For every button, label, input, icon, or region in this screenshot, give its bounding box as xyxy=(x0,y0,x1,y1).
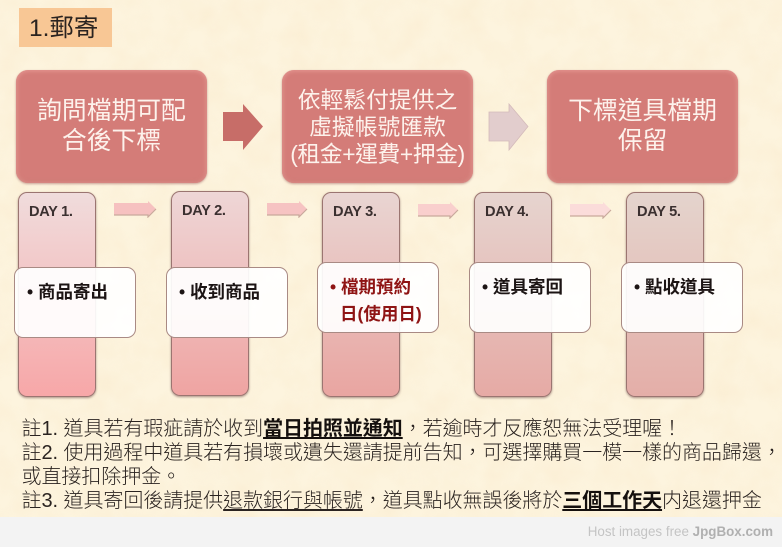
card: 收到商品 xyxy=(166,267,288,338)
day column 2: DAY 2. xyxy=(182,203,226,219)
card: 商品寄出 xyxy=(14,267,136,338)
day column 3: DAY 3. xyxy=(333,204,377,220)
card: 商品寄出: • 商品寄出 xyxy=(27,282,108,302)
day column 1 xyxy=(18,192,96,397)
title: 1.郵寄: 1.郵寄 xyxy=(29,15,98,42)
arrow: step 2 to step 3 xyxy=(488,103,528,151)
title: 1.郵寄 xyxy=(19,8,112,47)
day column 5: DAY 5. xyxy=(637,204,681,220)
card: 點收道具: • 點收道具 xyxy=(634,277,715,297)
day column 4: DAY 4. xyxy=(485,204,529,220)
arrow: step 1 to step 2 xyxy=(223,104,263,150)
card: 道具寄回: • 道具寄回 xyxy=(482,277,563,297)
step box: 下標道具檔期保留: 保留 xyxy=(618,128,667,155)
small arrow: day 4 to day 5 xyxy=(570,202,612,219)
note 3: 註3. 道具寄回後請提供退款銀行與帳號，道具點收無誤後將於三個工作天内退還押金 xyxy=(22,490,762,512)
step box: 詢問檔期可配合後下標: 合後下標 xyxy=(62,128,161,155)
day column 4 xyxy=(474,192,552,397)
footer bar xyxy=(0,517,782,547)
card: 檔期預約日(使用日): 日(使用日) xyxy=(340,304,422,324)
note 1: 註1. 道具若有瑕疵請於收到當日拍照並通知，若逾時才反應恕無法受理喔！ xyxy=(22,418,682,440)
day column 1: DAY 1. xyxy=(29,204,73,220)
note 2: 註2. 使用過程中道具若有損壞或遺失還請提前告知，可選擇購買一模一樣的商品歸還， xyxy=(22,442,782,464)
card: 檔期預約日(使用日): • 檔期預約 xyxy=(330,277,411,297)
step box: 詢問檔期可配合後下標: 詢問檔期可配 xyxy=(37,98,186,125)
day column 5 xyxy=(626,192,704,397)
small arrow: day 3 to day 4 xyxy=(418,202,458,219)
day column 3 xyxy=(322,192,400,397)
step box: 依輕鬆付提供之虛擬帳號匯款: 依輕鬆付提供之 xyxy=(298,87,457,113)
card: 點收道具 xyxy=(621,262,743,333)
note 2 continued: 或直接扣除押金。 xyxy=(22,466,181,488)
card: 收到商品: • 收到商品 xyxy=(179,282,260,302)
card: 道具寄回 xyxy=(469,262,591,333)
footer credit: Host images free JpgBox.com xyxy=(588,524,773,539)
step box: 依輕鬆付提供之虛擬帳號匯款 xyxy=(282,70,473,183)
card: 檔期預約日(使用日) xyxy=(317,262,439,333)
day column 2 xyxy=(171,191,249,396)
step box: 下標道具檔期保留 xyxy=(547,70,738,183)
step box: 下標道具檔期保留: 下標道具檔期 xyxy=(568,98,717,125)
small arrow: day 2 to day 3 xyxy=(267,201,308,218)
step box: 詢問檔期可配合後下標 xyxy=(16,70,207,183)
step box: 依輕鬆付提供之虛擬帳號匯款: (租金+運費+押金) xyxy=(290,141,465,167)
small arrow: day 1 to day 2 xyxy=(114,201,156,218)
step box: 依輕鬆付提供之虛擬帳號匯款: 虛擬帳號匯款 xyxy=(309,114,446,140)
